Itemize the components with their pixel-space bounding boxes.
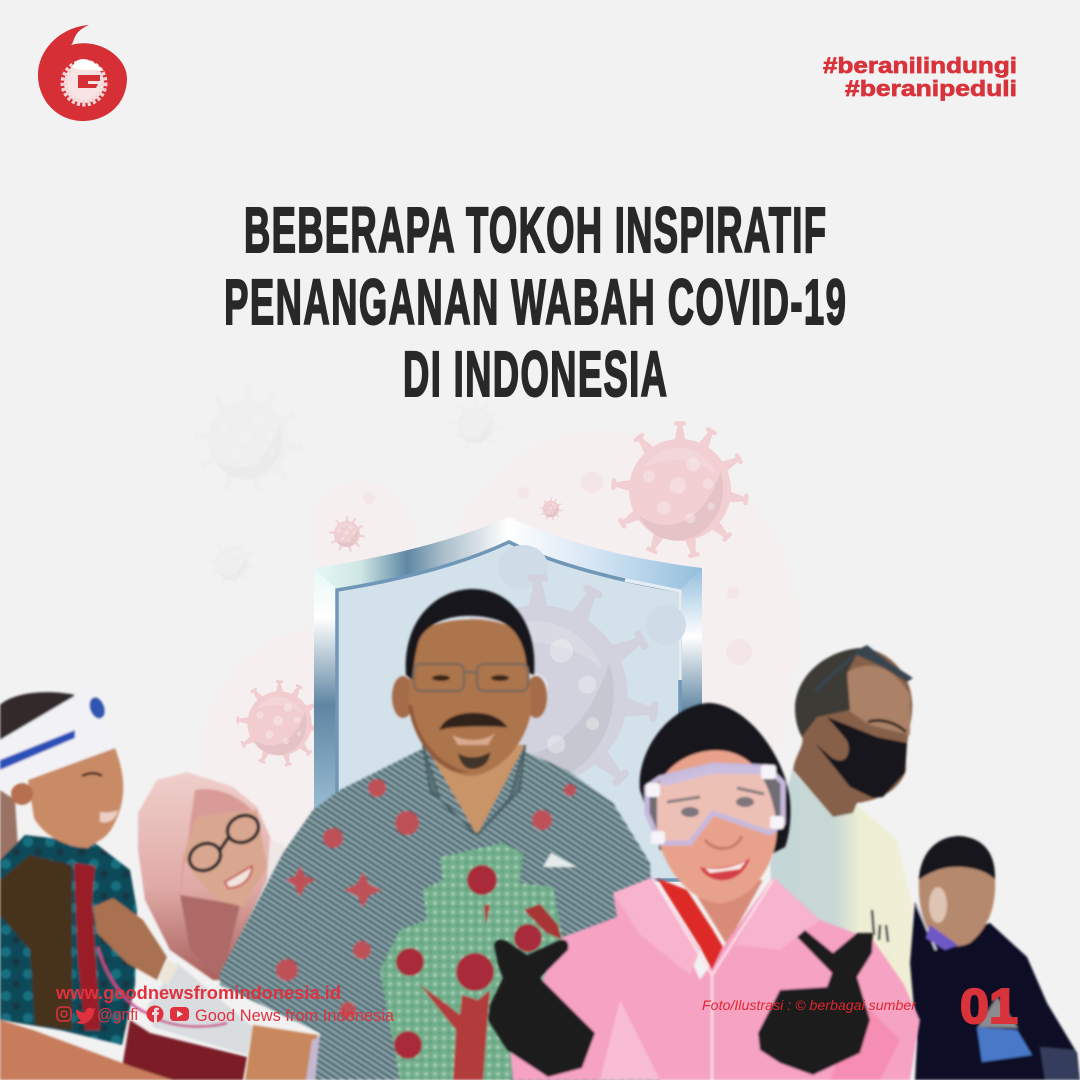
head	[28, 748, 123, 848]
title: DI INDONESIA	[403, 339, 667, 411]
title: PENANGANAN WABAH COVID-19	[224, 267, 846, 339]
face	[183, 810, 267, 907]
red tie	[74, 863, 100, 1030]
batik shirt	[220, 750, 660, 1080]
green tree panel	[380, 843, 563, 1080]
stethoscope	[98, 947, 227, 1027]
person: woman in pink suit	[488, 703, 920, 1080]
hair	[640, 703, 791, 860]
hair	[795, 648, 860, 737]
goggles	[647, 765, 783, 843]
background: faded viruses top left	[194, 386, 501, 586]
footer: social handles: @gnfi	[97, 1005, 138, 1024]
smile	[225, 866, 252, 888]
person: woman in pink hijab	[138, 772, 290, 980]
footer: photo credit: Foto/Ilustrasi : © berbagai sumber	[702, 998, 917, 1013]
footer: website: www.goodnewsfromindonesia.id	[55, 982, 341, 1003]
moustache and goatee	[443, 715, 503, 727]
shield spots	[498, 545, 686, 645]
logo	[38, 25, 127, 121]
shield inner panel	[337, 542, 680, 880]
page number: 01	[960, 980, 1018, 1034]
garment	[770, 770, 915, 1010]
white shoulder	[267, 838, 290, 885]
black glove right	[758, 930, 873, 1075]
forehead and eye	[845, 666, 910, 735]
bare arm	[245, 1025, 318, 1080]
person: man with black mask	[770, 645, 915, 1010]
blue patch	[977, 1027, 1032, 1062]
pink suit	[510, 877, 920, 1080]
footer: social handles	[57, 1005, 395, 1025]
sunglasses	[813, 645, 913, 692]
background: pink blobs	[198, 430, 798, 860]
face	[657, 750, 777, 903]
maroon skirt	[120, 1020, 247, 1080]
purple mask	[926, 925, 958, 950]
hair	[406, 589, 534, 680]
boy torso	[0, 835, 137, 1045]
glasses	[414, 664, 528, 691]
zip lines	[653, 878, 773, 1080]
boy hand	[93, 898, 167, 980]
hashtags: #beranipeduli	[845, 76, 1017, 101]
neck	[687, 880, 763, 945]
ears	[392, 676, 414, 718]
pink flowers	[276, 779, 576, 1018]
person: man in dark shirt	[910, 836, 1080, 1080]
red shirt	[657, 878, 723, 970]
icon: youtube	[170, 1007, 189, 1021]
black glove left	[488, 940, 595, 1077]
nose	[705, 836, 742, 849]
boy face detail	[82, 773, 102, 776]
behind boy	[0, 790, 18, 868]
neck	[425, 745, 525, 835]
watch	[158, 960, 178, 985]
person: boy with headband	[0, 687, 253, 1080]
headband	[0, 687, 115, 790]
eyes and brows	[681, 797, 754, 817]
batik brown panel	[0, 855, 72, 1030]
dark shirt	[910, 902, 1080, 1080]
white sleeve	[147, 963, 253, 1055]
eyes	[432, 675, 509, 681]
icon: twitter	[76, 1008, 96, 1024]
glasses	[185, 810, 263, 876]
hair	[919, 836, 995, 880]
icon: facebook	[146, 1006, 164, 1023]
icon: instagram	[57, 1007, 71, 1021]
shield	[314, 517, 702, 880]
hashtags	[823, 53, 1017, 101]
shirt trim	[917, 905, 936, 950]
suit highlights	[613, 877, 700, 975]
title: BEBERAPA TOKOH INSPIRATIF	[244, 195, 826, 267]
batik bird	[524, 904, 562, 940]
person: main man in batik	[220, 589, 660, 1080]
black mask	[815, 717, 907, 798]
shield rim	[314, 517, 702, 880]
collar	[423, 745, 477, 835]
boy forearm	[0, 1020, 173, 1080]
footer: social handles: Good News from Indonesia	[195, 1006, 395, 1025]
batik tree trunk	[420, 985, 490, 1080]
head	[793, 648, 912, 817]
hashtags: #beranilindungi	[823, 53, 1017, 78]
title	[224, 195, 846, 411]
shield virus	[417, 574, 659, 816]
hijab	[138, 772, 270, 980]
background: small pink spots	[363, 471, 752, 665]
background: pink viruses	[236, 421, 749, 767]
hair	[0, 692, 75, 760]
head	[919, 836, 995, 946]
smile	[700, 858, 750, 880]
pen pocket	[872, 910, 888, 942]
face	[408, 619, 532, 776]
red flower clusters	[394, 865, 542, 1059]
